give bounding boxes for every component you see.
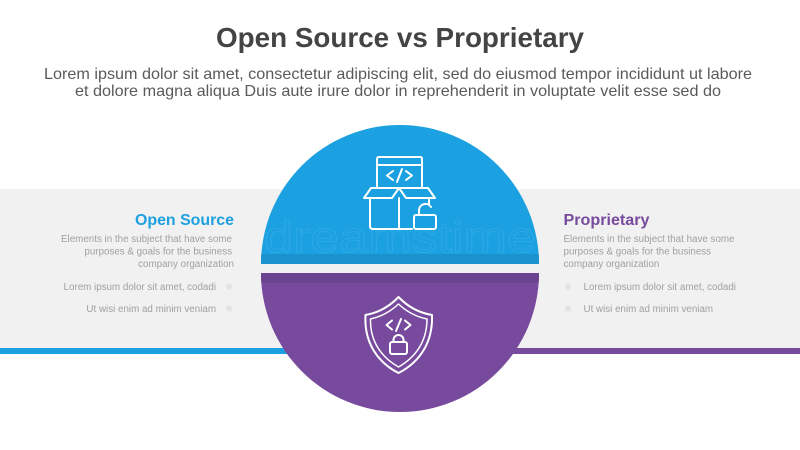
- description: open source: purposes & goals for the business: [84, 246, 232, 258]
- heading: open source: Open Source: [135, 212, 234, 229]
- description: proprietary: company organization: [564, 259, 659, 270]
- subtitle text: Lorem ipsum dolor sit amet, consectetur adipiscing elit, sed do eiusmod tempor incididunt ut labore: [44, 66, 752, 83]
- blue baseline: [0, 348, 400, 354]
- bullet: open source two: Ut wisi enim ad minim veniam: [86, 304, 216, 315]
- bullet: proprietary one: Lorem ipsum dolor sit amet, codadi: [584, 282, 736, 293]
- title: Open Source vs Proprietary: [216, 22, 584, 53]
- description: open source: Elements in the subject that have some: [61, 234, 233, 245]
- icon: shield with code and padlock: [365, 297, 432, 373]
- description: proprietary: purposes & goals for the business: [564, 246, 711, 258]
- panel: open source text: [61, 212, 234, 315]
- subtitle text: et dolore magna aliqua Duis aute irure dolor in reprehenderit in voluptate velit esse sed do: [75, 83, 721, 100]
- purple half circle: [261, 273, 539, 412]
- panel: proprietary text: [564, 212, 736, 315]
- watermark: dreamstime: [264, 213, 536, 262]
- icon: open box with code window and unlocked padlock: [364, 157, 436, 229]
- description: proprietary: Elements in the subject that have some: [564, 234, 735, 245]
- description: open source: company organization: [138, 259, 234, 270]
- description: open source: [61, 234, 234, 270]
- bullet: proprietary two: Ut wisi enim ad minim veniam: [584, 304, 713, 315]
- purple baseline: [400, 348, 800, 354]
- panel: background band: [0, 189, 800, 348]
- bullet: open source one: Lorem ipsum dolor sit amet, codadi: [64, 282, 216, 293]
- subtitle text: [44, 66, 752, 100]
- blue half circle: [261, 125, 539, 264]
- heading: proprietary: Proprietary: [564, 212, 650, 229]
- description: proprietary: [564, 234, 735, 270]
